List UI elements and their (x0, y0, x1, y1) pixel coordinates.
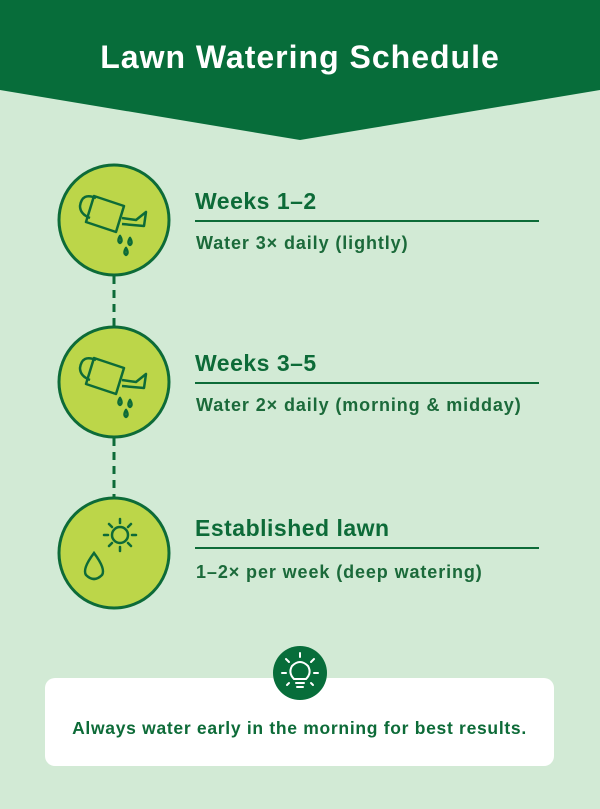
text: weeks 3-5: Water 2× daily (morning & midday) (196, 395, 522, 415)
icon: sun and drop (58, 496, 170, 610)
icon: lightbulb (273, 646, 327, 700)
header banner (0, 0, 600, 140)
text: established: 1–2× per week (deep watering) (196, 562, 483, 582)
heading: weeks 3-5 (195, 350, 539, 384)
tip box (45, 678, 554, 766)
heading: weeks 3-5: Weeks 3–5 (195, 350, 317, 376)
title: Lawn Watering Schedule (100, 39, 500, 75)
icon: watering can 1 (58, 164, 170, 276)
tip box: Always water early in the morning for best results. (72, 718, 527, 738)
heading: established (195, 515, 539, 549)
text: weeks 1-2: Water 3× daily (lightly) (196, 233, 408, 253)
heading: weeks 1-2: Weeks 1–2 (195, 188, 317, 214)
icon: watering can 2 (58, 326, 170, 438)
heading: weeks 1-2 (195, 188, 539, 222)
heading: established: Established lawn (195, 515, 390, 541)
